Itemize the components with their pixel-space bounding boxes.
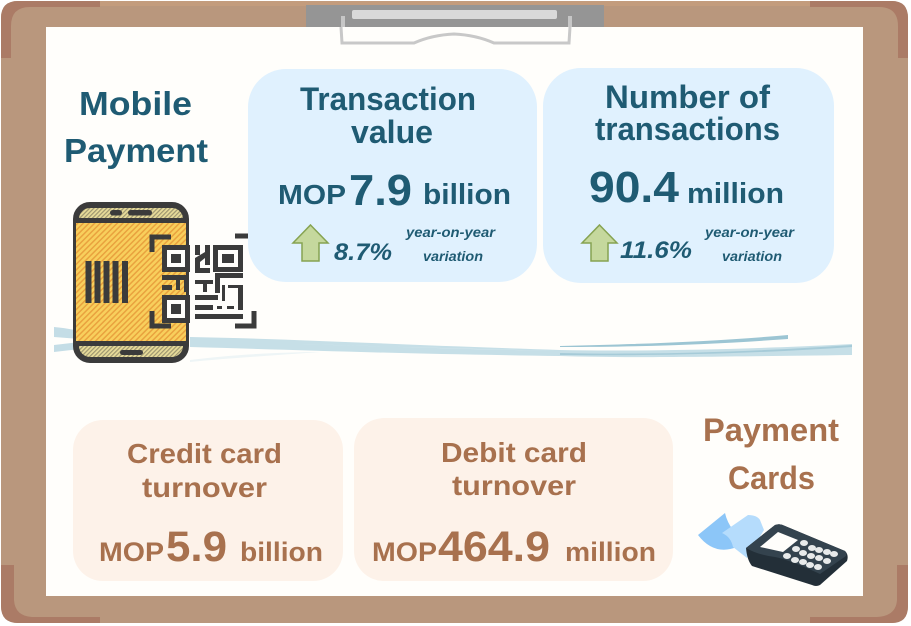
icon: phone with QR code — [76, 205, 254, 360]
panel: transaction value: billion — [423, 179, 511, 211]
heading: Mobile Payment — [64, 85, 208, 169]
panel: transaction value: MOP — [278, 179, 346, 210]
decorative wave — [54, 327, 852, 362]
panel: credit card turnover: turnover — [142, 472, 267, 503]
panel: debit card turnover: MOP — [372, 537, 437, 567]
panel: transaction value: 8.7% — [334, 239, 392, 266]
panel: debit card turnover: million — [565, 537, 656, 567]
panel: debit card turnover: turnover — [452, 470, 576, 501]
panel: transaction value — [248, 69, 537, 282]
heading: Mobile Payment: Payment — [64, 132, 208, 169]
panel: transaction value: Transaction — [300, 81, 476, 117]
panel: number of transactions: Number of — [605, 79, 770, 115]
panel: debit card turnover — [354, 418, 673, 581]
panel: credit card turnover: billion — [240, 537, 323, 567]
arrow: up — [582, 225, 617, 261]
heading: Mobile Payment: Mobile — [79, 85, 192, 122]
panel: number of transactions: transactions — [595, 111, 780, 147]
panel: number of transactions: million — [687, 178, 784, 210]
panel: number of transactions: variation — [722, 248, 782, 264]
panel: number of transactions: 11.6% — [620, 237, 692, 264]
panel: debit card turnover: Debit card — [441, 437, 587, 468]
arrow: up — [293, 225, 328, 261]
clip — [306, 5, 604, 43]
panel: transaction value: value — [351, 114, 433, 150]
panel: number of transactions: year-on-year — [704, 224, 796, 240]
panel: transaction value: year-on-year — [405, 224, 497, 240]
heading: Payment Cards — [703, 412, 839, 496]
panel: debit card turnover: 464.9 — [438, 523, 550, 571]
panel: credit card turnover: 5.9 — [166, 523, 227, 571]
panel: transaction value: 7.9 — [349, 166, 412, 215]
panel: credit card turnover: Credit card — [127, 438, 282, 469]
panel: number of transactions: 90.4 — [589, 163, 680, 212]
panel: number of transactions — [543, 68, 834, 283]
QR code — [152, 236, 254, 326]
panel: credit card turnover — [73, 420, 343, 581]
barcode — [88, 261, 125, 303]
heading: Payment Cards: Payment — [703, 412, 839, 448]
panel: credit card turnover: MOP — [99, 537, 164, 567]
panel: transaction value: variation — [423, 248, 483, 264]
icon: card terminal with receipt — [698, 513, 848, 586]
heading: Payment Cards: Cards — [728, 460, 815, 496]
